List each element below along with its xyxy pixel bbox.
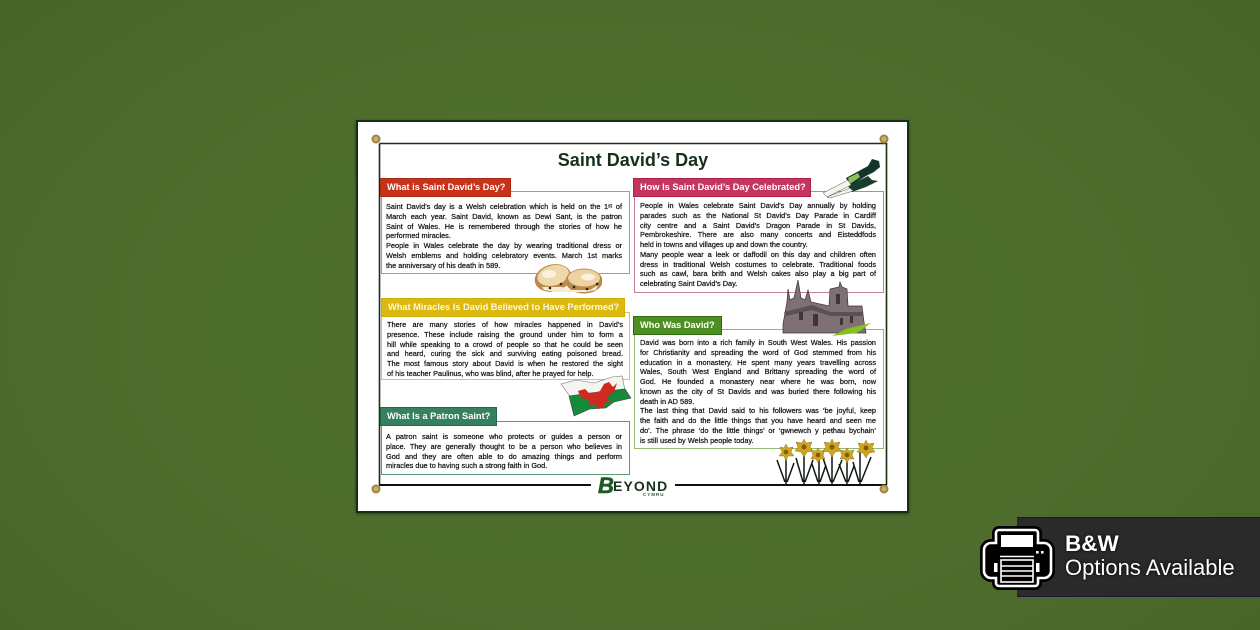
panel: How Is Saint David's Day Celebrated: city centre and a Saint David’s Dragon Parade in St Davids, [640,220,876,230]
panel: What Is a Patron Saint: miracles due to having such a strong faith in God. [386,461,547,470]
panel: Who Was David: education in a monastery. He spent many years travelling across [640,358,876,366]
panel: What Is a Patron Saint: A patron saint is someone who protects or guides a person or [386,432,622,441]
icon: Welsh cakes [534,264,602,294]
logo: Beyond Cymru: B [598,473,614,498]
icon: Welsh flag [560,376,632,416]
panel: Who Was David: Who Was David? [640,320,715,330]
panel: Who Was David: Wales, South West England and Brittany spreading the word of [640,367,876,376]
panel: Who Was David: David was born into a rich family in South West Wales. His passion [640,338,876,347]
panel: Who Was David: death in AD 589. [640,396,694,406]
banner: B&W options [1017,517,1260,597]
panel: What is Saint David's Day: What is Saint David’s Day? [387,182,505,192]
panel: What Miracles: and heard, curing the sick and surviving eating poisoned bread. [387,349,623,358]
panel: How Is Saint David's Day Celebrated: held in towns and villages up and down the country. [640,240,808,249]
panel: Who Was David: the faith and do the little things that you have heard and seen me [640,416,876,425]
panel: What Miracles: of his teacher Paulinus, who was blind, after he prayed for help. [387,369,594,378]
panel: What Miracles: What Miracles Is David Believed to Have Performed? [388,302,619,312]
panel: What is Saint David's Day: People in Wales celebrate the day by wearing traditional dress or [386,241,622,250]
panel: What Miracles: The most famous story about David is when he restored the sight [387,359,623,368]
panel: What is Saint David's Day: March each year. Saint David, known as Dewi Sant, is the patron [386,212,622,221]
panel: Who Was David [633,316,884,449]
panel: What is Saint David's Day: the anniversary of his death in 589. [386,260,500,270]
panel: What Is a Patron Saint: God and they are often able to do amazing things and perform [386,452,622,460]
icon: printer [980,526,1055,590]
panel: How Is Saint David's Day Celebrated: parades such as the National St David’s Day Parade in Cardiff [640,211,876,220]
panel: What Miracles [381,298,630,380]
panel: What Is a Patron Saint: place. They are generally thought to be a person who believes in [386,442,622,451]
panel: What is Saint David's Day: performed miracles. [386,231,451,240]
banner: B&W options: Options Available [1065,555,1235,580]
panel: What Miracles: presence. These include raising the ground under him to form a [387,330,623,339]
panel: How Is Saint David's Day Celebrated: such as cawl, bara brith and Welsh cakes also play a big part of [640,269,876,278]
panel: How Is Saint David's Day Celebrated: celebrating Saint David’s Day. [640,279,737,288]
logo: Beyond Cymru [598,473,668,498]
panel: What is Saint David's Day: Saint David’s day is a Welsh celebration which is held on the 1ˢᵗ of [386,202,622,211]
panel: What Is a Patron Saint [380,407,630,475]
panel: worksheet page [356,120,909,513]
icon: daffodils [776,439,876,484]
panel: What Is a Patron Saint: What Is a Patron Saint? [387,411,490,421]
logo: Beyond Cymru: EYOND [613,478,668,494]
banner: B&W options: B&W [1065,531,1119,556]
panel: How Is Saint David's Day Celebrated: How Is Saint David’s Day Celebrated? [640,182,806,192]
panel: Who Was David: is still used by Welsh people today. [640,436,754,444]
panel: What Miracles: There are many stories of how miracles happened in David’s [387,320,623,329]
icon: leeks [823,159,880,198]
panel: How Is Saint David's Day Celebrated [633,178,884,293]
panel: How Is Saint David's Day Celebrated: Pembrokeshire. There are also many concerts and Eisteddfods [640,230,876,239]
title: Saint David’s Day [558,150,708,170]
panel: Who Was David: God. He founded a monastery near where he was born, now [640,377,876,386]
panel: How Is Saint David's Day Celebrated: Many people wear a leek or daffodil on this day and children often [640,250,876,259]
page frame [372,134,888,494]
panel: What is Saint David's Day: Saint of Wales. He is remembered through the stories of how he [386,222,622,230]
logo: Beyond Cymru: CYMRU [643,492,664,497]
panel: Who Was David: known as the city of St Davids and was buried there following his [640,387,876,396]
panel: Who Was David: The last thing that David said to his followers was ‘be joyful, keep [640,406,876,415]
icon: cathedral [782,280,871,336]
panel: How Is Saint David's Day Celebrated: dress in traditional Welsh costumes to celebrate. Traditional foods [640,260,876,268]
panel: Who Was David: for Christianity and spreading the word of God stemmed from his [640,348,876,357]
panel: Who Was David: do’. The phrase ‘do the little things’ or ‘gwnewch y pethau bychain’ [640,426,876,435]
panel: What is Saint David's Day [380,178,630,274]
panel: What is Saint David's Day: Welsh emblems and holding celebratory events. March 1st marks [386,251,622,260]
panel: What Miracles: hill while speaking to a crowd of people so that he could be seen [387,340,623,348]
panel: How Is Saint David's Day Celebrated: People in Wales celebrate Saint David’s Day annually by holding [640,201,876,210]
